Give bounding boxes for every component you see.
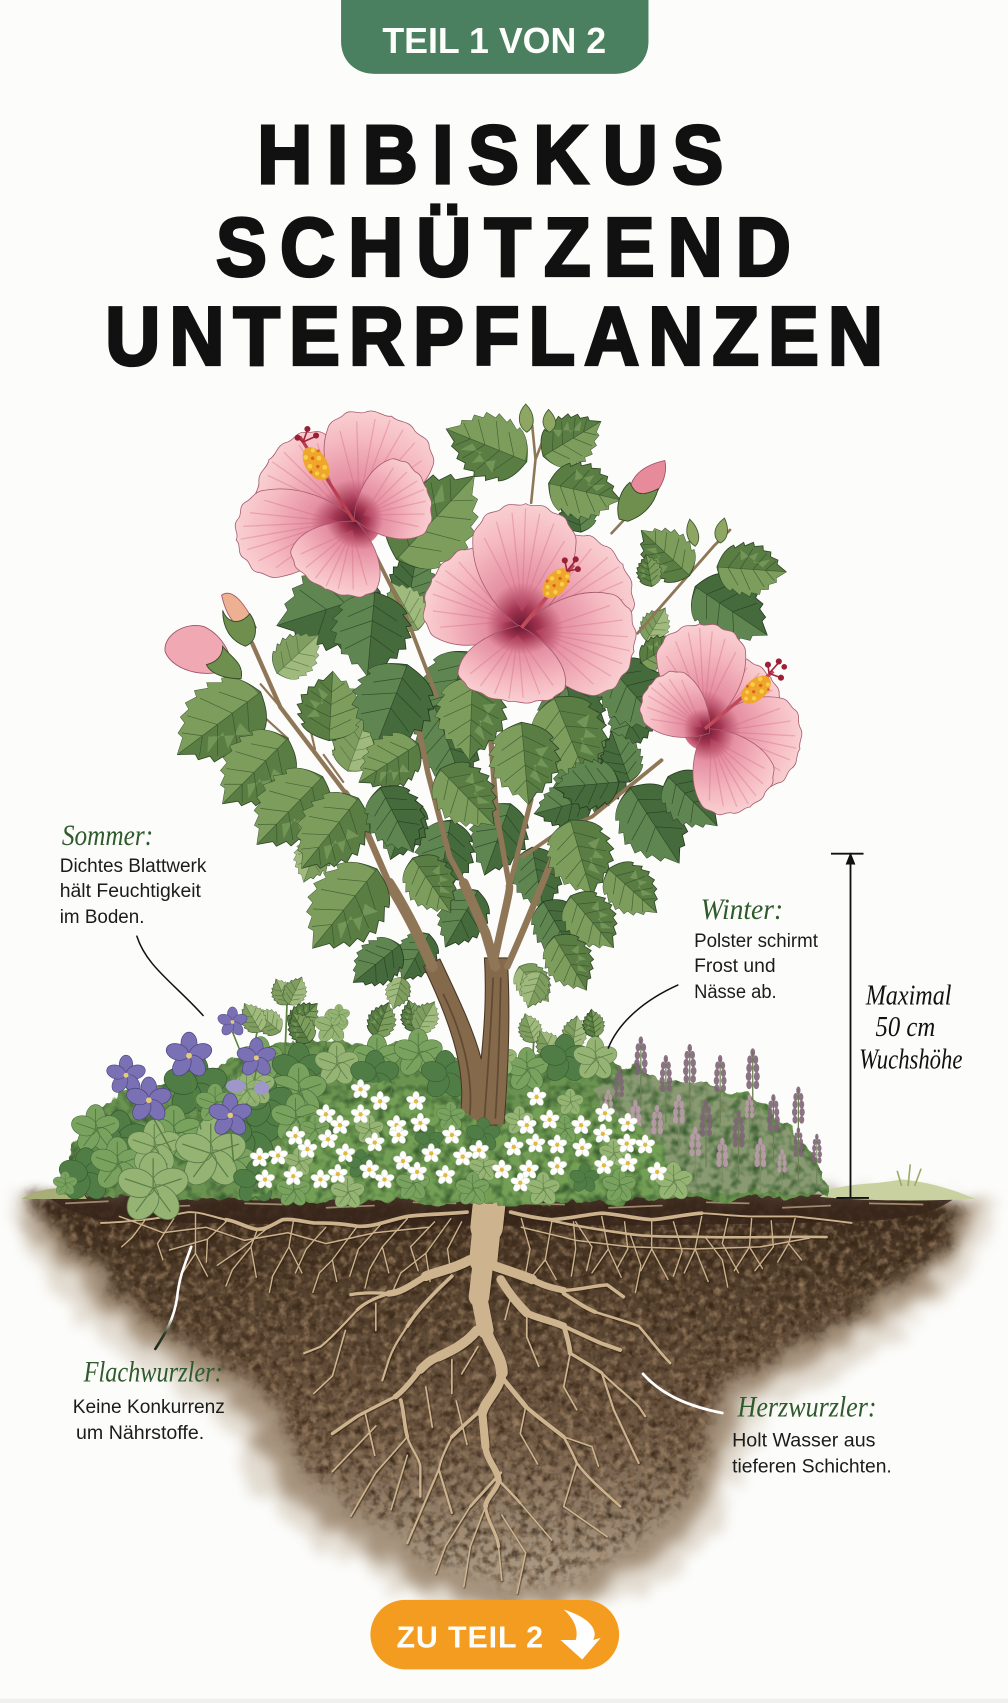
label: Flachwurzler: Keine Konkurrenz bbox=[73, 1397, 225, 1418]
callout line: Flachwurzler bbox=[155, 1247, 191, 1349]
icon: curved down arrow bbox=[560, 1610, 601, 1660]
trunks and branches bbox=[252, 426, 730, 1125]
green mound bbox=[63, 1041, 830, 1202]
lavender spires bbox=[604, 1036, 822, 1195]
label: Winter: Polster schirmt bbox=[694, 931, 819, 952]
callout line: Winter bbox=[608, 985, 678, 1048]
button: next part: ZU TEIL 2 bbox=[396, 1621, 543, 1655]
label: Flachwurzler bbox=[73, 1357, 225, 1444]
label: Winter: Nässe ab. bbox=[694, 982, 777, 1003]
label: maximal height bbox=[859, 981, 962, 1076]
right branches bbox=[495, 1266, 532, 1279]
label: maximal height: Wuchshöhe bbox=[859, 1045, 962, 1076]
background dark foliage bbox=[286, 487, 678, 1012]
label: Herzwurzler: Herzwurzler: bbox=[737, 1391, 877, 1423]
flower buds bbox=[165, 404, 728, 679]
shallow and taproot system bbox=[101, 1197, 852, 1593]
callout line: Herzwurzler bbox=[643, 1374, 722, 1413]
soil cross-section bbox=[7, 1193, 995, 1620]
title: SCHÜTZEND bbox=[216, 200, 791, 293]
title bbox=[105, 108, 883, 382]
label: Sommer: hält Feuchtigkeit bbox=[60, 881, 202, 902]
label: Sommer: Dichtes Blattwerk bbox=[60, 856, 207, 877]
broad left leaves bbox=[52, 1054, 330, 1226]
left branches bbox=[426, 1260, 470, 1276]
ground cover plants: back layer bbox=[52, 972, 830, 1226]
hibiscus flower: centre bbox=[408, 502, 652, 709]
label: Sommer bbox=[60, 820, 207, 928]
hibiscus flower: upper left bbox=[229, 397, 444, 609]
callout line: Sommer bbox=[137, 936, 203, 1016]
part badge: TEIL 1 VON 2 bbox=[382, 21, 606, 61]
violet flowers bbox=[105, 1007, 277, 1162]
button: next part bbox=[370, 1600, 619, 1669]
title: UNTERPFLANZEN bbox=[105, 289, 883, 382]
label: Sommer: Sommer: bbox=[62, 820, 153, 852]
back sprigs bbox=[233, 972, 619, 1101]
hibiscus flower: right bbox=[629, 622, 810, 828]
label: Winter: Winter: bbox=[701, 894, 783, 926]
ground surface grass bbox=[22, 1164, 975, 1200]
label: Sommer: im Boden. bbox=[60, 907, 144, 928]
label: Flachwurzler: Flachwurzler: bbox=[83, 1357, 223, 1389]
white-flower carpet bbox=[249, 1079, 695, 1211]
label: Flachwurzler: um Nährstoffe. bbox=[76, 1423, 204, 1444]
taproot trunk bbox=[487, 1197, 490, 1227]
label: maximal height: Maximal bbox=[865, 981, 952, 1012]
label: Winter bbox=[694, 894, 819, 1003]
foreground leaves bbox=[153, 398, 788, 1013]
label: Herzwurzler: Holt Wasser aus bbox=[732, 1431, 875, 1452]
height measure bbox=[831, 854, 869, 1198]
surface roots bbox=[101, 1212, 852, 1292]
title: HIBISKUS bbox=[257, 108, 723, 201]
label: maximal height: 50 cm bbox=[875, 1012, 935, 1043]
label: Herzwurzler bbox=[732, 1391, 892, 1478]
part badge bbox=[341, 0, 648, 74]
hibiscus shrub bbox=[153, 397, 810, 1125]
label: Winter: Frost und bbox=[694, 956, 776, 977]
lavender foliage bbox=[592, 1072, 826, 1193]
label: Herzwurzler: tieferen Schichten. bbox=[732, 1457, 892, 1478]
